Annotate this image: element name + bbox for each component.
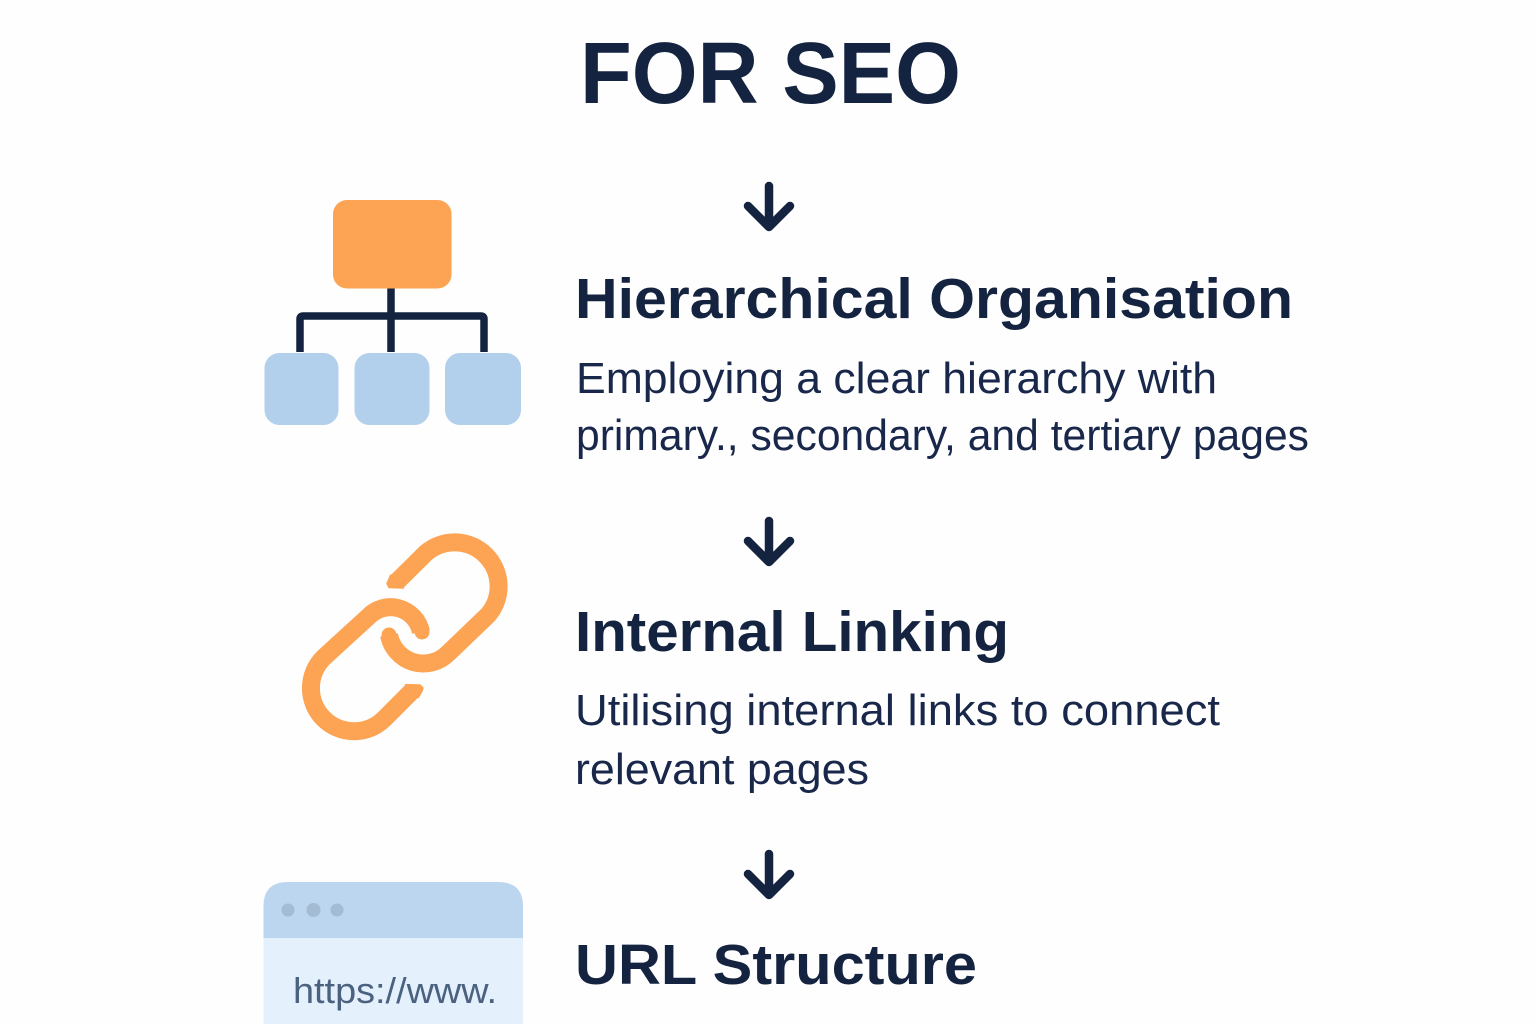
upper link: [382, 542, 499, 664]
connector lines: [300, 288, 484, 352]
text: hierarchical organisation description: Employing a clear hierarchy with: [576, 354, 1217, 403]
heading: internal linking: Internal Linking: [575, 600, 1009, 664]
top page box: [333, 200, 452, 288]
text: internal linking description: [575, 686, 1220, 794]
arrow: to hierarchical organisation: [748, 186, 790, 227]
icon: chain link: [311, 542, 499, 731]
window dots: [282, 903, 344, 917]
browser title bar: [264, 882, 523, 938]
icon: site hierarchy: [264, 200, 521, 425]
text: hierarchical organisation description: [576, 354, 1309, 460]
text: hierarchical organisation description: primary., secondary, and tertiary pages: [576, 411, 1309, 460]
arrow: to internal linking: [748, 521, 790, 562]
title: FOR SEO: [580, 25, 961, 122]
child page box 2: [354, 353, 430, 425]
arrow: to url structure: [748, 854, 790, 895]
text: internal linking description: relevant pages: [575, 745, 869, 794]
child page box 3: [445, 353, 521, 425]
lower link: [311, 607, 430, 731]
url text: https://www.: [293, 970, 497, 1011]
heading: url structure: URL Structure: [575, 933, 977, 997]
icon: browser window: [264, 882, 523, 1024]
browser body: [264, 936, 523, 1024]
child page box 1: [264, 353, 338, 425]
text: internal linking description: Utilising internal links to connect: [575, 686, 1220, 735]
heading: hierarchical organisation: Hierarchical Organisation: [575, 267, 1293, 331]
